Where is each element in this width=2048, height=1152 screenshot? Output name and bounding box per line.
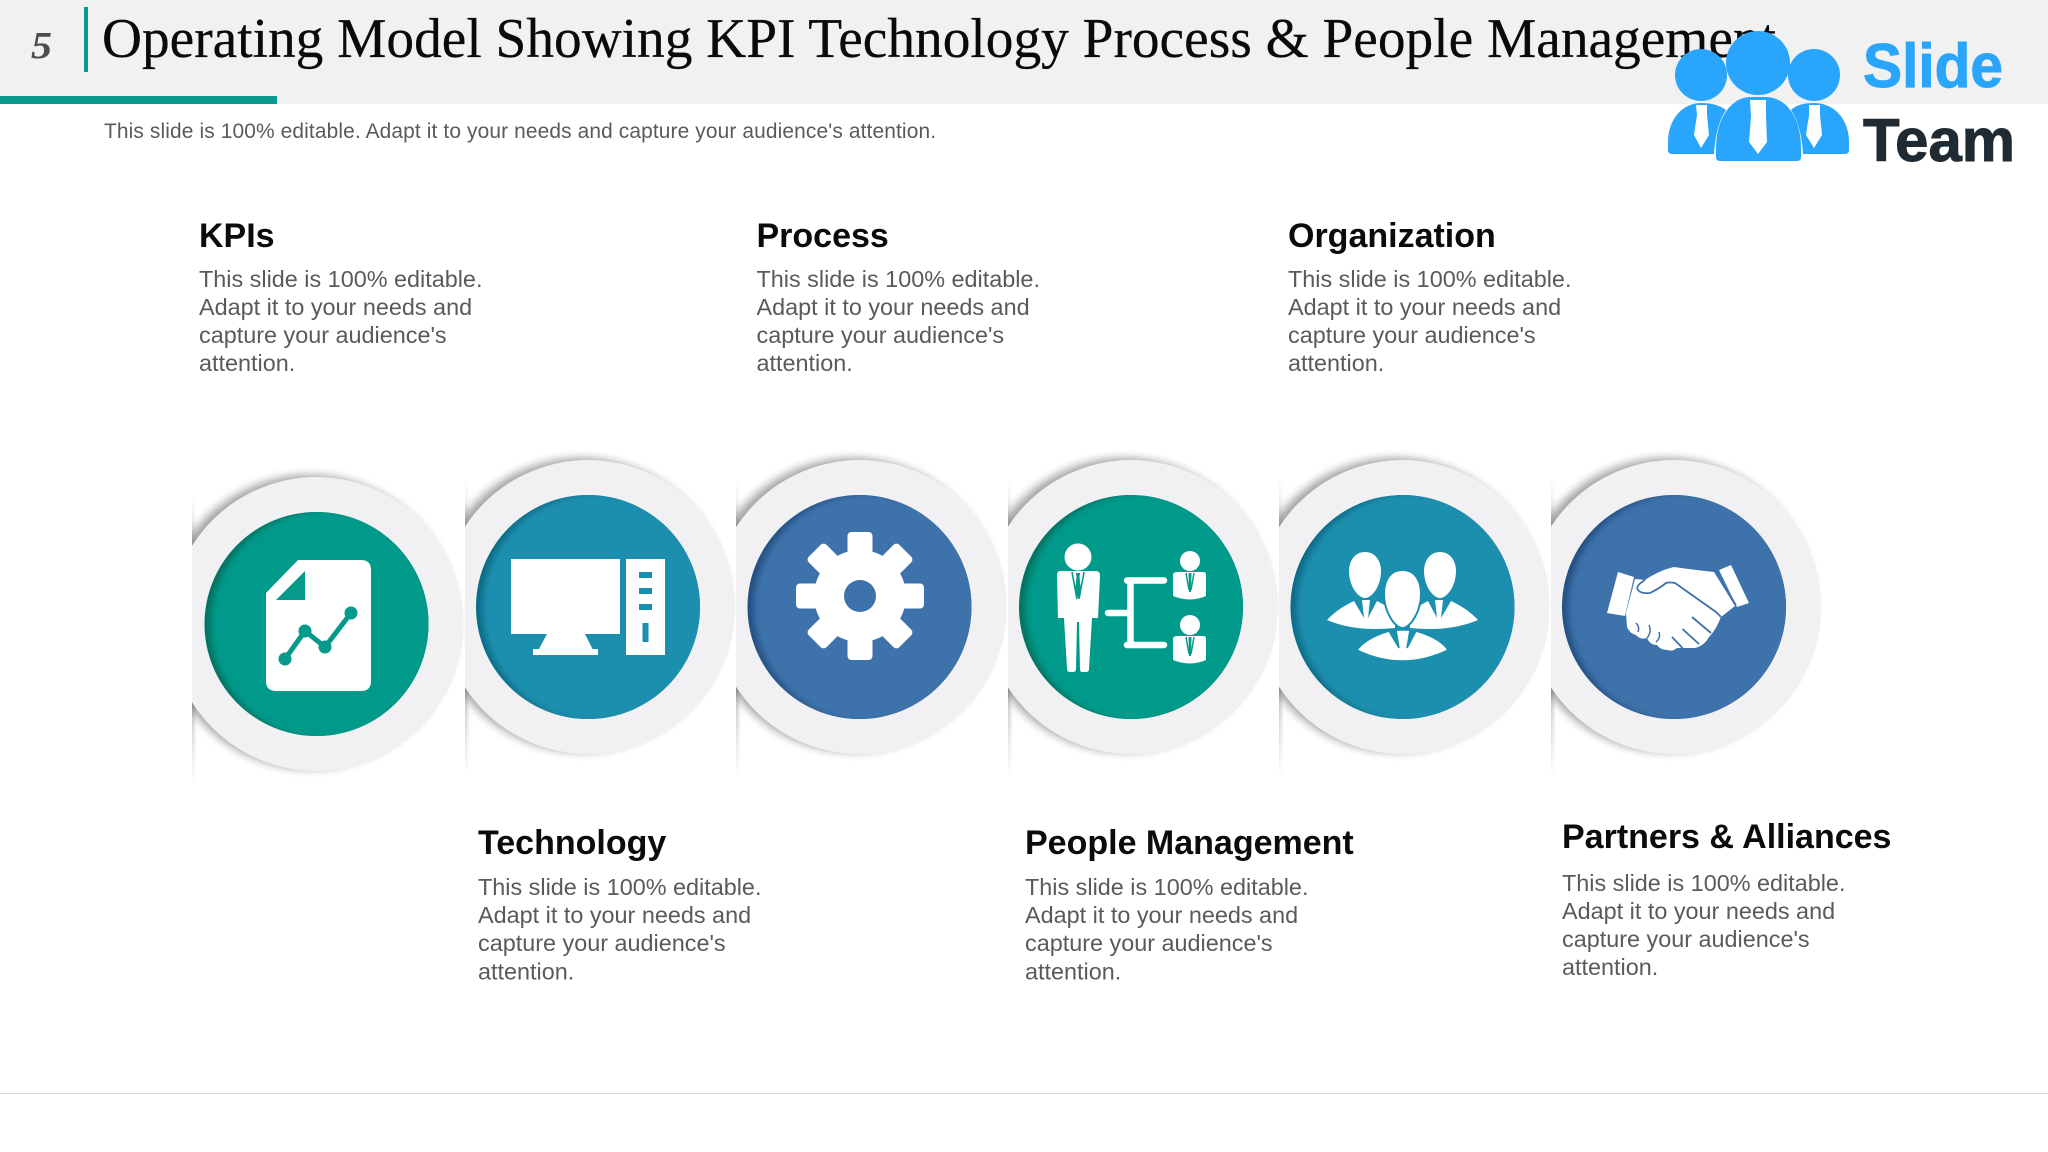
text block: Technology description: attention. xyxy=(478,958,574,984)
text block: Partners description: capture your audience's xyxy=(1562,926,1810,952)
text block: People Management description: This slide is 100% editable. xyxy=(1025,874,1308,900)
text block: Process description: capture your audience's xyxy=(756,322,1004,348)
heading: Organization: Organization xyxy=(1288,217,1496,255)
heading: Process: Process xyxy=(756,217,889,255)
text block: Technology description: This slide is 100% editable. xyxy=(478,874,761,900)
text block: Organization description: attention. xyxy=(1288,350,1384,376)
title: Operating Model Showing KPI Technology Process & People Management xyxy=(102,8,1776,70)
text block: Organization description: capture your audience's xyxy=(1288,322,1536,348)
text block: KPIs description: attention. xyxy=(199,350,295,376)
text block: KPIs description: Adapt it to your needs and xyxy=(199,294,472,320)
icon: group of three people xyxy=(1327,552,1478,661)
icon: desktop computer xyxy=(511,559,665,655)
step circle: Process xyxy=(736,452,1006,766)
text block: Process description: This slide is 100% editable. xyxy=(756,266,1040,292)
icon: handshake xyxy=(1607,565,1749,651)
heading: Partners & Alliances: Partners & Alliances xyxy=(1562,818,1891,856)
step circle: Partners and Alliances xyxy=(1551,452,1821,766)
text block: People Management description: Adapt it to your needs and xyxy=(1025,902,1298,928)
text block: Process description: attention. xyxy=(756,350,853,376)
text block: Partners description: This slide is 100% editable. xyxy=(1562,870,1845,896)
panel: KPIs text xyxy=(199,217,482,376)
step circle: Organization xyxy=(1279,452,1550,766)
logo: Slide Team: Team xyxy=(1863,107,2015,174)
text block: Technology description: Adapt it to your needs and xyxy=(478,902,751,928)
text block: Organization description: This slide is 100% editable. xyxy=(1288,266,1571,292)
text block: Organization description: Adapt it to your needs and xyxy=(1288,294,1561,320)
step circle: People Management xyxy=(1008,452,1278,766)
slide number: 5 xyxy=(31,25,52,67)
logo: Slide Team xyxy=(1668,31,2015,174)
step circle: KPIs xyxy=(192,470,464,774)
text block: Partners description: Adapt it to your needs and xyxy=(1562,898,1835,924)
icon: gear xyxy=(796,532,924,660)
footer divider xyxy=(0,1093,2048,1094)
text block: People Management description: capture your audience's xyxy=(1025,930,1273,956)
text block: People Management description: attention. xyxy=(1025,958,1121,984)
logo: Slide Team: Slide xyxy=(1863,32,2003,101)
text block: Process description: Adapt it to your needs and xyxy=(756,294,1030,320)
step circle: Technology xyxy=(465,452,735,766)
panel: Technology text xyxy=(478,824,761,984)
panel: People Management text xyxy=(1025,824,1354,984)
heading: People Management: People Management xyxy=(1025,824,1354,862)
heading: KPIs: KPIs xyxy=(199,217,275,255)
text block: KPIs description: capture your audience's xyxy=(199,322,447,348)
panel: Organization text xyxy=(1288,217,1571,376)
panel: Process text xyxy=(756,217,1040,376)
icon: manager with reporting team xyxy=(1057,544,1206,672)
header band xyxy=(0,0,2048,104)
text block: KPIs description: This slide is 100% editable. xyxy=(199,266,482,292)
text block: Technology description: capture your audience's xyxy=(478,930,726,956)
panel: Partners and Alliances text xyxy=(1562,818,1891,980)
icon: document with line chart xyxy=(266,560,371,691)
subtitle: This slide is 100% editable. Adapt it to your needs and capture your audience's attention. xyxy=(104,120,936,143)
heading: Technology: Technology xyxy=(478,824,666,862)
text block: Partners description: attention. xyxy=(1562,954,1658,980)
